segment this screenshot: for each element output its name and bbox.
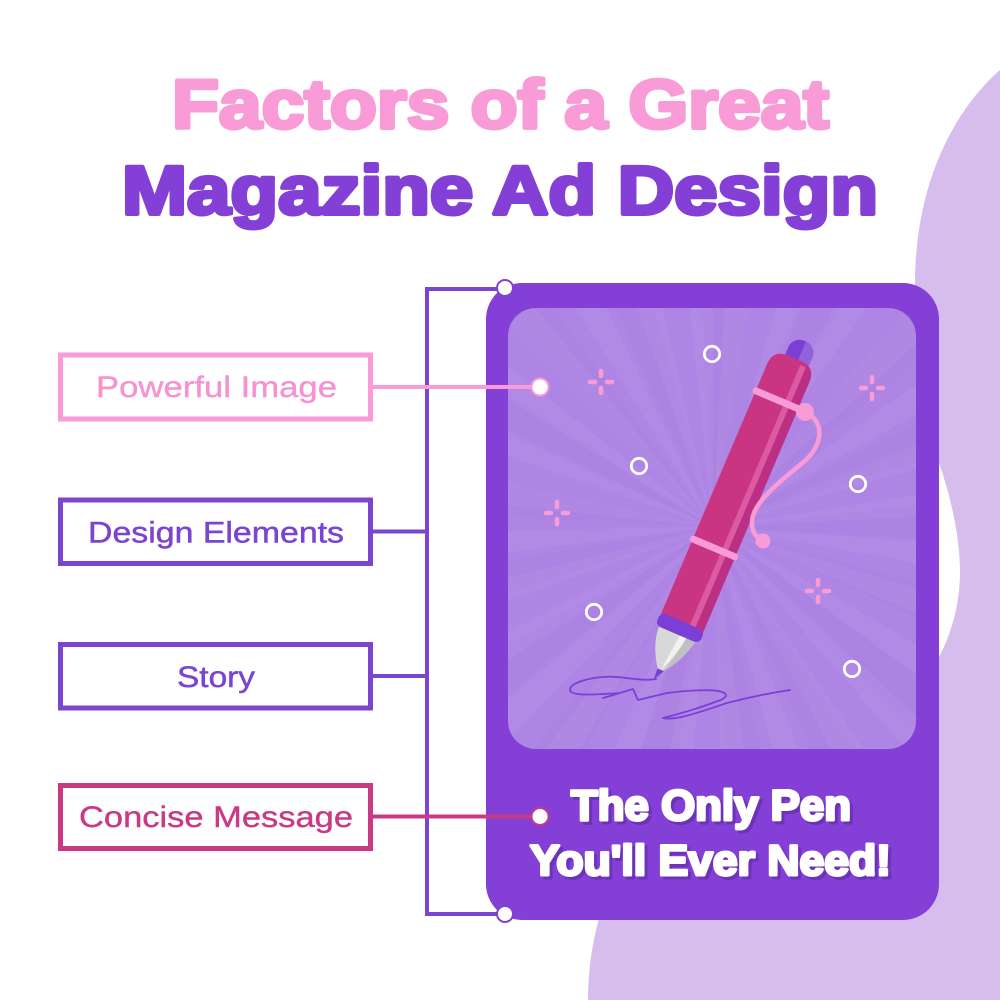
pen barrel [659,349,816,637]
pink connector with dot [373,378,548,396]
label: Design Elements [60,500,370,564]
ring decorations [586,346,866,677]
bracket bottom dot [497,906,513,922]
label: Story [60,644,370,708]
panel: magazine ad card [486,283,939,920]
pen collar [655,612,705,644]
label: Concise Message [60,786,370,848]
headline text [530,782,891,885]
icon: pen [633,330,826,692]
signature [570,677,790,719]
title: Magazine Ad Design [122,152,878,229]
pen silver tip [643,625,696,679]
headline text: The Only Pen [571,782,851,830]
headline shadow [533,785,894,888]
bracket top dot [497,280,513,296]
headline shadow: You'll Ever Need! [533,840,894,888]
headline text: You'll Ever Need! [530,837,891,885]
sparkles [546,371,883,602]
title: Factors of a Great [172,66,829,143]
bracket connector [373,289,505,914]
label: Concise Message: Concise Message [79,801,353,834]
pen clip cord [752,403,819,548]
pen rings [689,386,802,561]
headline shadow: The Only Pen [574,785,854,833]
panel: sunburst image area [508,308,916,749]
label: Story: Story [177,661,255,694]
label: Design Elements: Design Elements [88,516,344,550]
ad headline [530,782,894,888]
magenta connector with dot [373,808,548,825]
label: Powerful Image [60,355,370,419]
label: Powerful Image: Powerful Image [96,371,337,404]
title [122,66,878,229]
pen nib [653,668,664,682]
pen top button [781,336,817,376]
